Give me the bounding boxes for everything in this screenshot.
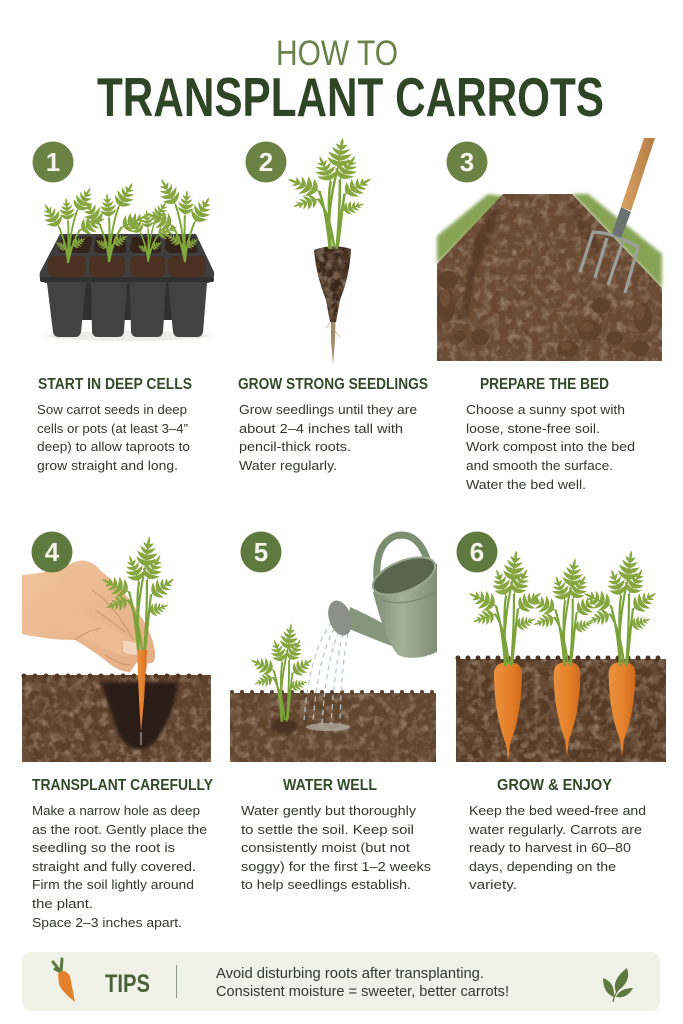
- body text: Keep the bed weed-free and: [469, 803, 646, 818]
- illustration: seedling with root: [285, 138, 375, 365]
- panel: step 6 grow and enjoy: [456, 532, 666, 892]
- step number badge 6: 6: [470, 537, 484, 567]
- body text: [32, 803, 207, 930]
- body text: Space 2–3 inches apart.: [32, 915, 182, 930]
- body text: [239, 402, 417, 473]
- illustration: hand: [22, 561, 155, 672]
- tips text: [216, 966, 509, 1000]
- panel: step 1 start in deep cells: [32, 142, 216, 473]
- illustration: soil cross-section: [456, 658, 666, 762]
- tips label: TIPS: [105, 970, 150, 998]
- body text: loose, stone-free soil.: [466, 421, 600, 436]
- body text: the plant.: [32, 896, 93, 911]
- step number badge 6: [456, 532, 498, 572]
- heading: PREPARE THE BED: [480, 376, 609, 393]
- step number badge 5: 5: [254, 537, 268, 567]
- illustration: watering can: [324, 535, 440, 658]
- illustration: water stream: [304, 622, 348, 725]
- body text: [37, 402, 190, 473]
- body text: Work compost into the bed: [466, 439, 635, 454]
- body text: seedling so the root is: [32, 840, 175, 855]
- body text: consistently moist (but not: [241, 840, 410, 855]
- heading: WATER WELL: [283, 777, 377, 794]
- illustration: seedling tray: [40, 234, 214, 341]
- body text: Firm the soil lightly around: [32, 877, 194, 892]
- panel: step 3 prepare the bed: [437, 138, 662, 492]
- illustration: soil with planting hole: [22, 675, 211, 762]
- body text: variety.: [469, 877, 517, 892]
- icon: carrot: [53, 959, 75, 1002]
- step number badge 3: 3: [460, 147, 474, 177]
- body text: and smooth the surface.: [466, 458, 613, 473]
- icon: leaves: [603, 968, 633, 1002]
- body text: cells or pots (at least 3–4”: [37, 421, 188, 436]
- body text: to settle the soil. Keep soil: [241, 822, 414, 837]
- step number badge 1: [32, 142, 74, 182]
- body text: [468, 803, 646, 892]
- body text: grow straight and long.: [37, 458, 178, 473]
- body text: deep) to allow taproots to: [37, 439, 190, 454]
- illustration: three carrots: [466, 550, 660, 761]
- body text: Water regularly.: [239, 458, 337, 473]
- body text: Choose a sunny spot with: [466, 402, 625, 417]
- panel: tips: [22, 952, 660, 1011]
- illustration: seedlings in tray: [39, 176, 216, 263]
- body text: [466, 402, 635, 492]
- step number badge 4: [32, 532, 72, 572]
- heading: START IN DEEP CELLS: [38, 376, 192, 393]
- body text: as the root. Gently place the: [32, 822, 207, 837]
- body text: Sow carrot seeds in deep: [37, 402, 187, 417]
- body text: Make a narrow hole as deep: [32, 803, 200, 818]
- heading: TRANSPLANT CAREFULLY: [32, 777, 214, 794]
- body text: about 2–4 inches tall with: [239, 421, 403, 436]
- step number badge 1: 1: [46, 147, 60, 177]
- step number badge 2: [246, 142, 286, 182]
- body text: Grow seedlings until they are: [239, 402, 417, 417]
- illustration: soil: [230, 692, 436, 762]
- illustration: young seedling: [248, 623, 315, 722]
- illustration: garden bed with fork: [437, 138, 662, 361]
- body text: soggy) for the first 1–2 weeks: [241, 859, 431, 874]
- fork: [580, 232, 638, 293]
- body text: to help seedlings establish.: [241, 877, 411, 892]
- panel: step 5 water well: [230, 532, 440, 892]
- body text: ready to harvest in 60–80: [469, 840, 631, 855]
- body text: days, depending on the: [469, 859, 616, 874]
- panel: step 2 grow strong seedlings: [238, 138, 428, 473]
- heading: GROW STRONG SEEDLINGS: [238, 376, 428, 393]
- step number badge 3: [446, 142, 488, 182]
- title: HOW TO: [276, 34, 398, 73]
- body text: Water gently but thoroughly: [241, 803, 416, 818]
- tips text: Avoid disturbing roots after transplanting.: [216, 966, 484, 982]
- title: [97, 34, 604, 128]
- body text: pencil-thick roots.: [239, 439, 351, 454]
- step number badge 4: 4: [45, 537, 60, 567]
- body text: water regularly. Carrots are: [468, 822, 642, 837]
- step number badge 5: [240, 532, 282, 572]
- body text: [241, 803, 431, 892]
- heading: GROW & ENJOY: [497, 777, 613, 794]
- tips text: Consistent moisture = sweeter, better carrots!: [216, 984, 509, 1000]
- illustration: carrot seedling: [99, 536, 178, 745]
- panel: step 4 transplant carefully: [22, 532, 214, 930]
- body text: Water the bed well.: [466, 477, 586, 492]
- body text: straight and fully covered.: [32, 859, 196, 874]
- step number badge 2: 2: [259, 147, 273, 177]
